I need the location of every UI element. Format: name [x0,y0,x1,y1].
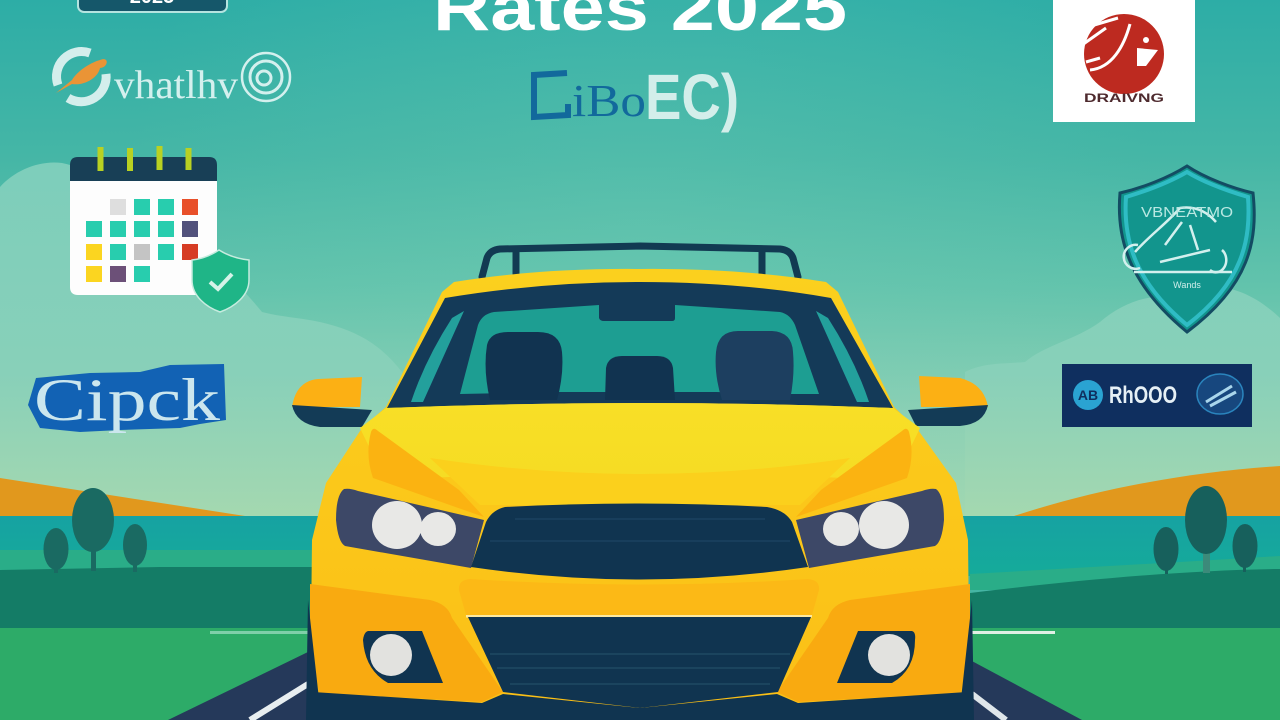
logo caption: DRAIVNG [1084,93,1164,105]
left body edge [306,600,322,720]
left cloud [0,162,402,516]
shield caption: Wands [1173,280,1201,290]
left side glass [411,311,464,402]
icon: blue circle [1073,380,1103,410]
lower hood [430,458,850,505]
left mirror [292,377,372,427]
right headlight [796,489,944,568]
calendar page [70,181,217,295]
front lower valance [308,692,972,720]
left side panel [310,584,503,702]
centre seat [605,356,675,400]
rear window [460,305,819,394]
logo: top centre [534,61,739,133]
road [168,651,1082,720]
left seat [486,332,562,400]
banner badge initials: AB [1078,387,1098,403]
calendar shield check [192,250,249,312]
bumper strip [459,579,819,615]
dark green field [0,567,1280,630]
right seat [716,331,794,400]
right side glass [816,311,869,402]
hood [360,403,920,480]
calendar rings [98,146,192,171]
shield heading: VBNEATMO [1141,204,1233,221]
icon: blue square [534,73,568,117]
trees right [1154,486,1258,574]
upper grille [471,504,808,580]
car [292,246,988,720]
logo: navy banner [1062,364,1252,427]
icon: swirl emblem [56,52,107,102]
right side panel [777,584,970,702]
right fog light [837,631,915,683]
car body [310,269,970,720]
right green shore [970,556,1280,590]
right cloud [965,287,1280,516]
left green shore [0,550,320,580]
shield badge [1119,166,1254,332]
right mirror [908,376,988,426]
bumper highlight [466,615,812,618]
windshield frame [387,282,893,408]
field highlight lines [210,631,1055,634]
left fog light [363,631,443,683]
background sky [0,0,1280,520]
logo: top left swirl [56,52,290,107]
right body edge [958,600,974,720]
logo wordmark blue: iBo [572,75,646,126]
logo: blue torn wordmark [28,364,226,433]
shield inner rim [1126,172,1249,325]
icon: ring emblem [242,53,290,101]
left orange hill [0,478,245,516]
icon: ring seal [1197,374,1243,414]
calendar header [70,157,217,181]
shield outline [1119,166,1254,332]
logo wordmark pale: EC) [645,61,739,133]
calendar icon [70,146,249,312]
right hood crease [796,429,912,517]
icon: red disc [1082,14,1164,94]
lower grille [468,617,811,708]
roof rack [482,246,798,277]
banner wordmark: RhOOO [1109,382,1177,409]
shield car drawing [1124,207,1232,272]
logo: red emblem on white [1053,0,1195,122]
light green field [0,628,1280,720]
water band [0,516,1280,576]
left headlight [336,489,484,568]
trees left [44,488,147,573]
year badge [78,0,227,12]
logo: blue torn wordmark: Cipck [34,367,220,433]
left hood crease [368,429,484,517]
right orange hill [1014,466,1280,516]
calendar cells [86,199,198,282]
logo wordmark: vhatlhv [114,62,238,107]
